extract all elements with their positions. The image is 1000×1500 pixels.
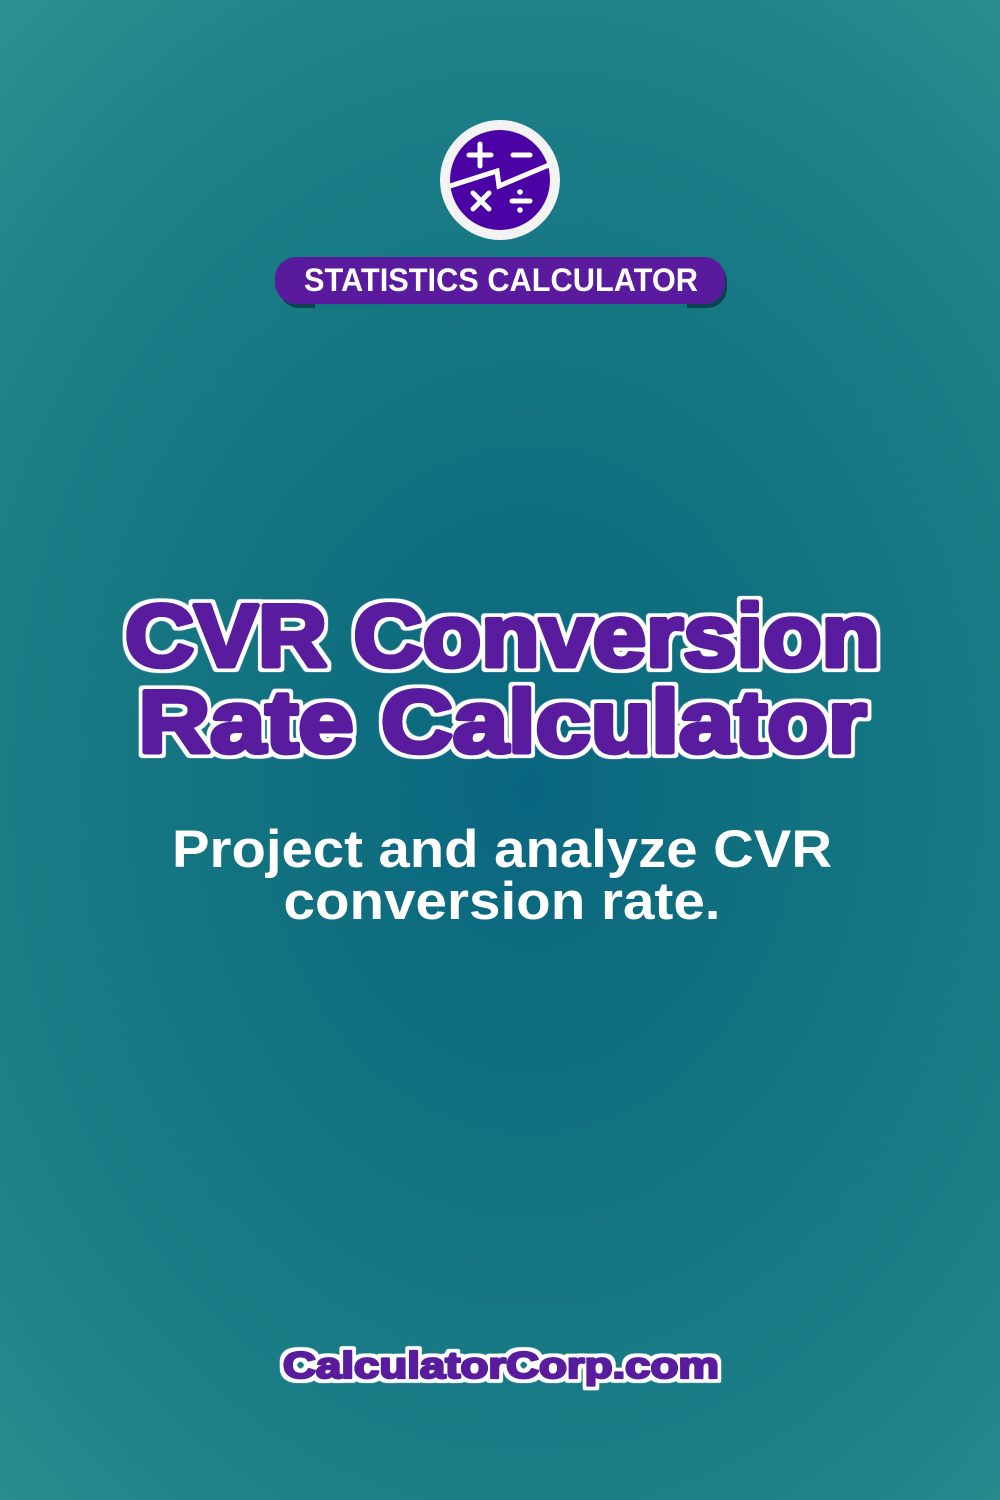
icon: calculator logo bbox=[440, 120, 560, 240]
badge: statistics calculator: STATISTICS CALCULATOR bbox=[304, 262, 698, 298]
title: CVR Conversion bbox=[125, 586, 880, 685]
subtitle bbox=[172, 820, 832, 931]
footer: website: CalculatorCorp.com bbox=[283, 1345, 719, 1386]
subtitle: Project and analyze CVR bbox=[172, 820, 832, 879]
badge: statistics calculator bbox=[275, 257, 727, 309]
title bbox=[125, 586, 880, 771]
subtitle: conversion rate. bbox=[284, 872, 720, 931]
title: Rate Calculator bbox=[138, 672, 866, 771]
